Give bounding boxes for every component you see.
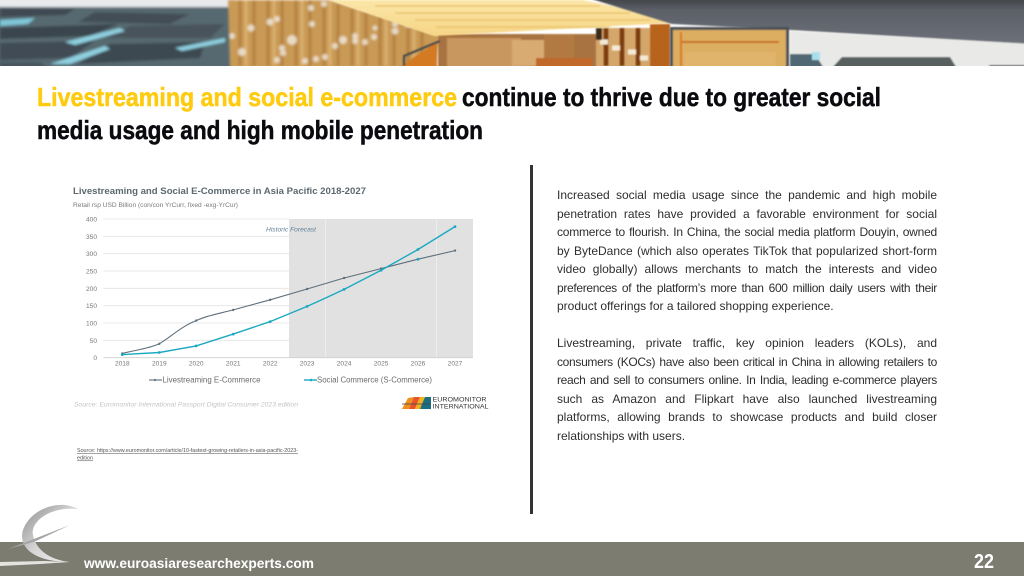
title line 1 remainder: continue to thrive due to greater social <box>462 82 881 112</box>
title line 1 highlight: Livestreaming and social e-commerce <box>37 82 457 112</box>
website url: www.euroasiaresearchexperts.com <box>83 555 314 571</box>
body text: such as Amazon and Flipkart have also launched livestreaming <box>557 392 937 406</box>
x axis labels: 2020 <box>189 360 204 368</box>
container roof <box>329 0 670 36</box>
container door <box>670 27 789 71</box>
x axis labels: 2024 <box>337 360 352 368</box>
historic forecast label: Historic Forecast <box>266 226 316 234</box>
y axis labels: 150 <box>86 303 97 310</box>
body text: Increased social media usage since the pandemic and high mobile <box>557 188 937 202</box>
title line 2: media usage and high mobile penetration <box>37 115 483 145</box>
y axis labels: 50 <box>90 338 97 345</box>
body text: commerce to flourish. In China, the social media platform Douyin, owned <box>557 225 937 239</box>
y axis labels <box>86 216 97 362</box>
y axis labels: 250 <box>86 268 97 276</box>
company logo swoosh <box>0 505 78 566</box>
y axis labels: 100 <box>86 320 97 328</box>
x axis labels: 2019 <box>152 360 167 368</box>
euromonitor logo: EUROMONITOR <box>432 396 487 404</box>
body text: by ByteDance (which also operates TikTok that popularized short-form <box>557 244 937 258</box>
chart title: Livestreaming and Social E-Commerce in Asia Pacific 2018-2027 <box>73 185 366 196</box>
x axis labels <box>115 360 463 368</box>
body text: platforms, allowing brands to showcase products and build closer <box>557 410 937 424</box>
euromonitor logo: INTERNATIONAL <box>432 404 489 410</box>
y axis labels: 400 <box>86 216 97 224</box>
web source citation <box>77 448 298 462</box>
banner photo: shipping container on keyboard <box>0 0 1024 66</box>
chart source note: Source: Euromonitor International Passport Digital Consumer 2023 edition <box>74 402 299 408</box>
body text: reach and sell to consumers online. In India, leading e-commerce players <box>557 373 937 387</box>
x axis labels: 2026 <box>411 360 426 368</box>
series: livestreaming e-commerce <box>121 249 456 355</box>
body text: preferences of the platform’s more than 600 million daily users with their <box>557 280 937 294</box>
series: social commerce <box>121 225 456 356</box>
body text: video globally) allows merchants to match the interests and video <box>557 262 937 276</box>
x axis labels: 2023 <box>300 360 315 368</box>
x axis labels: 2027 <box>448 360 463 368</box>
body text: Livestreaming, private traffic, key opinion leaders (KOLs), and <box>557 336 937 350</box>
x axis labels: 2018 <box>115 360 130 368</box>
x axis labels: 2021 <box>226 360 241 368</box>
x axis labels: 2025 <box>374 360 389 368</box>
vertical divider <box>530 165 532 514</box>
container open front <box>404 24 670 70</box>
y axis labels: 200 <box>86 286 97 293</box>
container left wall <box>228 0 440 70</box>
forecast shaded area <box>289 219 473 358</box>
euromonitor logo <box>402 396 489 410</box>
web source citation: Source: https://www.euromonitor.com/article/10-fastest-growing-retailers-in-asia-pacific-2023- <box>77 448 298 454</box>
legend <box>149 376 432 384</box>
legend: Livestreaming E-Commerce <box>162 376 260 384</box>
page number: 22 <box>974 551 994 573</box>
web source citation: edition <box>77 456 93 462</box>
gridlines <box>104 219 289 340</box>
body text: penetration rates have provided a favorable environment for social <box>557 206 937 220</box>
y axis labels: 0 <box>93 355 97 362</box>
body text <box>557 188 938 442</box>
grey table band and keyboard right <box>582 0 1024 70</box>
chart subtitle: Retail rsp USD Billion (con/con YrCurr, fixed -exg-YrCur) <box>73 203 238 209</box>
y axis labels: 350 <box>86 234 97 241</box>
body text: product offerings for a tailored shopping experience. <box>557 299 834 313</box>
y axis labels: 300 <box>86 251 97 258</box>
title <box>37 82 881 145</box>
x axis labels: 2022 <box>263 360 278 368</box>
legend: Social Commerce (S-Commerce) <box>317 376 432 384</box>
body text: relationships with users. <box>557 428 685 442</box>
body text: consumers (KOCs) have also been critical in China in allowing retailers to <box>557 354 937 368</box>
keyboard left <box>0 0 236 70</box>
